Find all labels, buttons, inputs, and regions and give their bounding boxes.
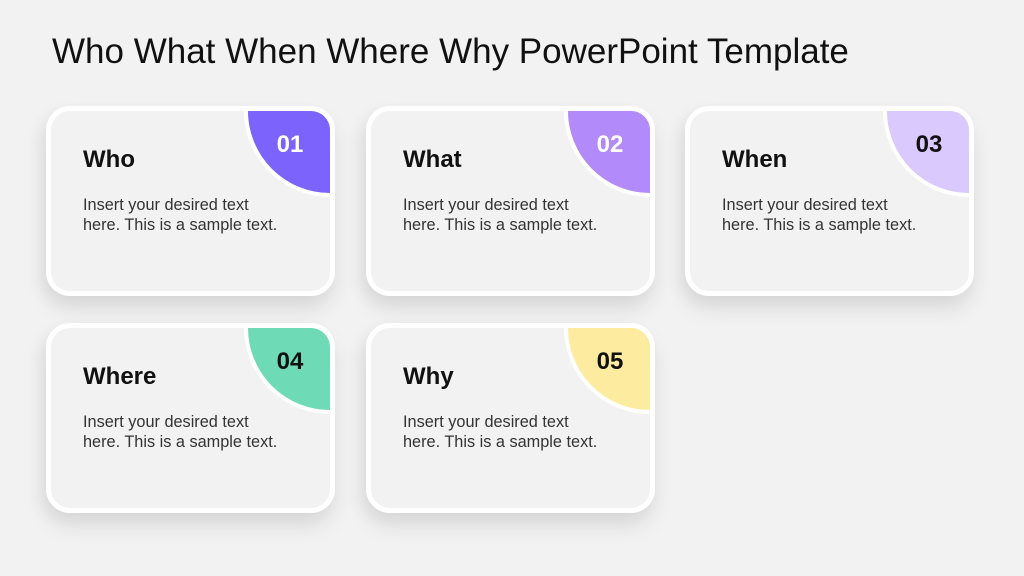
text why: Insert your desired text bbox=[403, 413, 569, 431]
number 03: 03 bbox=[916, 131, 942, 158]
heading where: Where bbox=[83, 363, 156, 390]
card: what bbox=[366, 106, 655, 296]
number 02: 02 bbox=[597, 131, 623, 158]
text why bbox=[403, 413, 597, 451]
badge 01 bbox=[244, 25, 416, 197]
card: when bbox=[685, 106, 974, 296]
text when: here. This is a sample text. bbox=[722, 216, 916, 234]
text when bbox=[722, 196, 916, 234]
heading who: Who bbox=[83, 146, 135, 173]
badge 05 bbox=[564, 242, 736, 414]
text who bbox=[83, 196, 277, 234]
number 01: 01 bbox=[277, 131, 303, 158]
card: where bbox=[46, 323, 335, 513]
badge 03 bbox=[883, 25, 1024, 197]
heading what: What bbox=[403, 146, 462, 173]
text why: here. This is a sample text. bbox=[403, 433, 597, 451]
text where: here. This is a sample text. bbox=[83, 433, 277, 451]
text what bbox=[403, 196, 597, 234]
title: Who What When Where Why PowerPoint Template bbox=[52, 32, 849, 71]
text what: here. This is a sample text. bbox=[403, 216, 597, 234]
text who: Insert your desired text bbox=[83, 196, 249, 214]
heading when: When bbox=[722, 146, 787, 173]
card: why bbox=[366, 323, 655, 513]
card: who bbox=[46, 106, 335, 296]
heading why: Why bbox=[403, 363, 454, 390]
text when: Insert your desired text bbox=[722, 196, 888, 214]
text where bbox=[83, 413, 277, 451]
text what: Insert your desired text bbox=[403, 196, 569, 214]
badge 04 bbox=[244, 242, 416, 414]
text who: here. This is a sample text. bbox=[83, 216, 277, 234]
text where: Insert your desired text bbox=[83, 413, 249, 431]
number 04: 04 bbox=[277, 348, 303, 375]
number 05: 05 bbox=[597, 348, 623, 375]
badge 02 bbox=[564, 25, 736, 197]
